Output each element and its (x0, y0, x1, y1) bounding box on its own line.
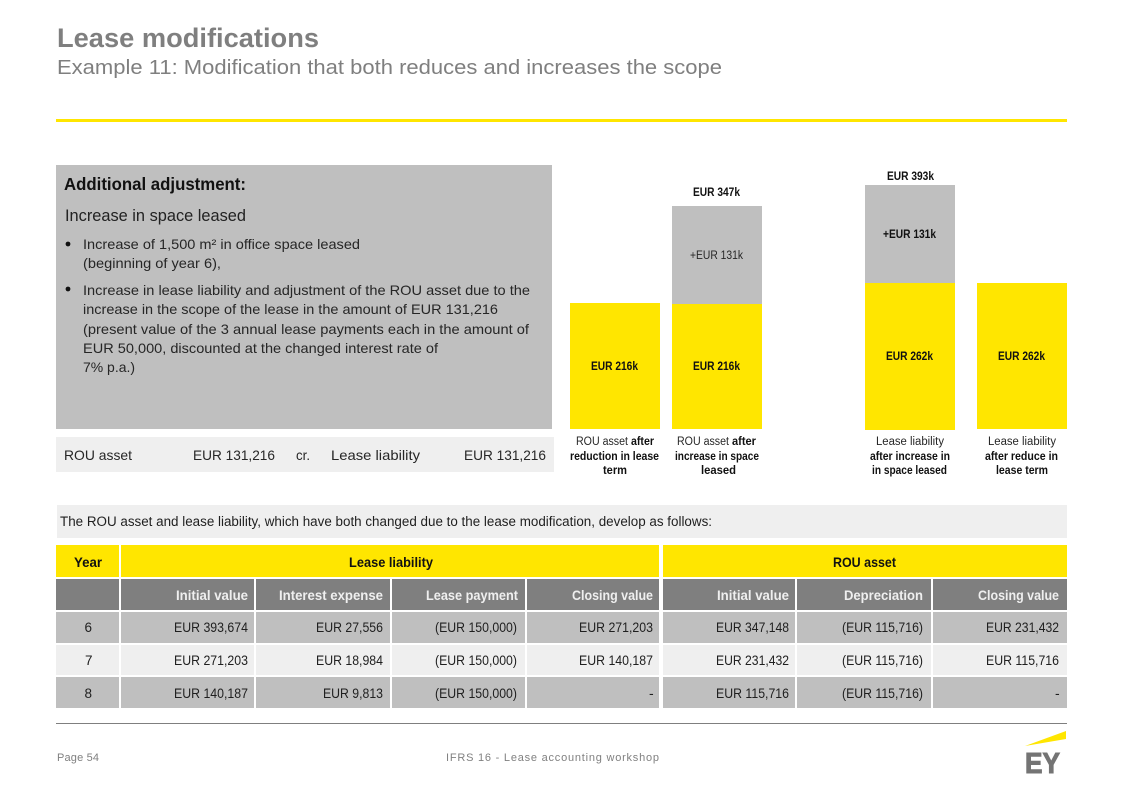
chart: ROU asset after increase: +EUR 131k (690, 250, 743, 262)
table row: year 6 (56, 612, 1067, 643)
table (56, 545, 1067, 708)
table header: columns: Depreciation (844, 587, 923, 603)
caption: Lease liability (876, 436, 944, 448)
bullet two (66, 282, 530, 375)
table row: year 6: EUR 347,148 (716, 619, 789, 635)
table row: year 6: EUR 27,556 (316, 619, 383, 635)
caption (675, 436, 759, 477)
chart: ROU asset after reduction (570, 303, 660, 477)
caption: leased (701, 465, 736, 477)
caption (570, 436, 659, 477)
bullet one (66, 236, 360, 271)
caption: increase in space (675, 451, 759, 463)
journal entry row: cr. (296, 447, 310, 463)
caption (870, 436, 950, 477)
journal entry row: ROU asset (64, 447, 132, 463)
table header: columns: Closing value (978, 587, 1059, 603)
table row: year 8: EUR 140,187 (174, 685, 248, 701)
chart: lease liability after increase (865, 171, 955, 477)
chart: lease liability after increase: EUR 393k (887, 171, 935, 183)
table row: year 8: 8 (84, 686, 92, 701)
table row: year 6: EUR 393,674 (174, 619, 248, 635)
journal entry row: EUR 131,216 (193, 447, 275, 463)
table header: groups: ROU asset (833, 554, 896, 570)
table row: year 8: EUR 115,716 (716, 685, 789, 701)
panel: additional adjustment (56, 165, 552, 429)
table row: year 7: (EUR 115,716) (842, 652, 923, 668)
table row: year 7: EUR 271,203 (174, 652, 248, 668)
table row: year 7: 7 (85, 653, 93, 668)
panel heading: Additional adjustment: (64, 174, 246, 194)
caption: after increase in (870, 451, 950, 463)
table row: year 8: - (649, 685, 654, 701)
table row: year 7: EUR 231,432 (716, 652, 789, 668)
table row: year 8: (EUR 115,716) (842, 685, 923, 701)
caption: ROU asset (576, 436, 629, 448)
table row: year 6: 6 (84, 620, 92, 635)
chart: lease liability after increase: EUR 262k (886, 351, 934, 363)
icon: EY logo (1025, 731, 1066, 780)
footer: workshop name: IFRS 16 - Lease accounting workshop (446, 752, 659, 764)
journal entry row: EUR 131,216 (464, 447, 546, 463)
table row: year 8: EUR 9,813 (323, 685, 383, 701)
footer: page number: Page 54 (57, 752, 99, 764)
table header: columns: Initial value (176, 587, 248, 603)
chart: ROU asset after increase (672, 187, 762, 477)
bullet two: (present value of the 3 annual lease payments each in the amount of (83, 321, 529, 337)
table row: year 7: EUR 115,716 (986, 652, 1059, 668)
caption: reduction in lease (570, 451, 659, 463)
bullet two: 7% p.a.) (83, 359, 135, 375)
table row: year 6: (EUR 150,000) (435, 619, 517, 635)
bullet two: increase in the scope of the lease in the amount of EUR 131,216 (83, 301, 498, 317)
note strip (57, 505, 1067, 538)
table row: year 7: (EUR 150,000) (435, 652, 517, 668)
table header: columns: Interest expense (279, 587, 383, 603)
caption: after (732, 436, 756, 448)
table row: year 6: EUR 231,432 (986, 619, 1059, 635)
subtitle: Example 11: Modification that both reduces and increases the scope (57, 56, 722, 79)
table row: year 7 (56, 645, 1067, 675)
table header: columns: Closing value (572, 587, 653, 603)
chart: lease liability after reduction: EUR 262k (998, 351, 1046, 363)
chart: ROU asset after increase: EUR 216k (693, 361, 741, 373)
caption: lease term (996, 465, 1048, 477)
chart: lease liability after reduction (977, 283, 1067, 477)
table header: columns (56, 579, 1067, 610)
chart: ROU asset after increase: EUR 347k (693, 187, 741, 199)
bullet one: Increase of 1,500 m² in office space leased (83, 236, 360, 252)
caption: term (603, 465, 627, 477)
chart: lease liability after increase: +EUR 131k (883, 229, 937, 241)
caption: after reduce in (985, 451, 1058, 463)
table row: year 8: - (1055, 685, 1060, 701)
caption: Lease liability (988, 436, 1056, 448)
table row: year 7: EUR 140,187 (579, 652, 653, 668)
bullet two: EUR 50,000, discounted at the changed interest rate of (83, 340, 438, 356)
table header: groups (56, 545, 1067, 577)
table row: year 6: (EUR 115,716) (842, 619, 923, 635)
table row: year 7: EUR 18,984 (316, 652, 383, 668)
caption: in space leased (872, 465, 947, 477)
bullet one: (beginning of year 6), (83, 255, 221, 271)
chart: ROU asset after reduction: EUR 216k (591, 361, 639, 373)
note strip: The ROU asset and lease liability, which have both changed due to the lease modification, develop as follows: (60, 514, 712, 529)
panel subheading: Increase in space leased (65, 206, 246, 225)
table row: year 8 (56, 677, 1067, 708)
table header: columns: Lease payment (426, 587, 518, 603)
bullet two: Increase in lease liability and adjustment of the ROU asset due to the (83, 282, 530, 298)
table header: groups: Lease liability (349, 554, 433, 570)
caption: ROU asset (677, 436, 730, 448)
table row: year 8: (EUR 150,000) (435, 685, 517, 701)
title: Lease modifications (57, 23, 319, 53)
journal entry row: Lease liability (331, 447, 420, 463)
table header: groups: Year (74, 554, 103, 570)
caption: after (631, 436, 654, 448)
title (57, 23, 722, 79)
journal entry row (56, 437, 554, 472)
table header: columns: Initial value (717, 587, 789, 603)
table row: year 6: EUR 271,203 (579, 619, 653, 635)
caption (985, 436, 1058, 477)
icon: EY logo: EY (1025, 748, 1060, 780)
